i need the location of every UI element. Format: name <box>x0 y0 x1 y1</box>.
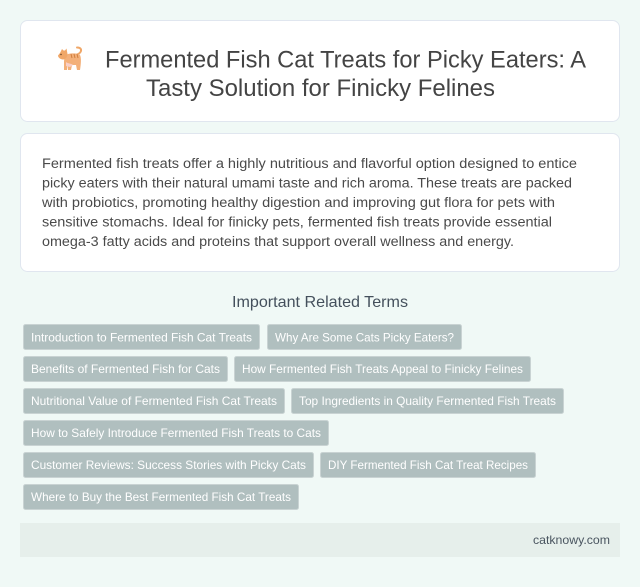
panel: title card <box>20 20 620 122</box>
heading: related terms: Important Related Terms <box>232 294 408 311</box>
tag: Top Ingredients in Quality Fermented Fish Treats <box>299 394 556 408</box>
tag: Nutritional Value of Fermented Fish Cat Treats <box>31 394 277 408</box>
icon: orange cat <box>58 48 81 70</box>
tag: Why Are Some Cats Picky Eaters? <box>275 330 454 344</box>
tag: DIY Fermented Fish Cat Treat Recipes <box>328 458 528 472</box>
tag <box>24 484 298 510</box>
title line 1: Fermented Fish Cat Treats for Picky Eaters: A <box>105 46 586 74</box>
tag <box>24 324 260 350</box>
tag <box>24 452 314 478</box>
description text: sensitive stomachs. Ideal for finicky pets, fermented fish treats provide essential <box>42 214 552 230</box>
tag <box>234 356 530 382</box>
description text <box>41 156 577 250</box>
tag: Introduction to Fermented Fish Cat Treats <box>31 330 252 344</box>
description text: Fermented fish treats offer a highly nutritious and flavorful option designed to entice <box>42 156 577 172</box>
tag <box>24 388 284 414</box>
tag <box>24 420 328 446</box>
description text: with probiotics, promoting healthy digestion and improving gut flora for pets with <box>41 195 555 211</box>
footer site name: catknowy.com <box>533 533 610 547</box>
tag <box>292 388 564 414</box>
tag list <box>24 324 564 510</box>
description text: omega-3 fatty acids and proteins that support overall wellness and energy. <box>42 234 514 250</box>
tag <box>24 356 228 382</box>
tag: Benefits of Fermented Fish for Cats <box>31 362 220 376</box>
tag <box>268 324 462 350</box>
tag: Where to Buy the Best Fermented Fish Cat Treats <box>31 490 291 504</box>
tag: How Fermented Fish Treats Appeal to Finicky Felines <box>242 362 523 376</box>
title line 2: Tasty Solution for Finicky Felines <box>146 75 495 102</box>
tag: How to Safely Introduce Fermented Fish Treats to Cats <box>31 426 321 440</box>
footer bar <box>20 523 620 557</box>
tag <box>320 452 536 478</box>
tag: Customer Reviews: Success Stories with Picky Cats <box>31 458 306 472</box>
description text: picky eaters with their natural umami taste and rich aroma. These treats are packed <box>42 176 572 192</box>
panel: description <box>20 134 620 272</box>
